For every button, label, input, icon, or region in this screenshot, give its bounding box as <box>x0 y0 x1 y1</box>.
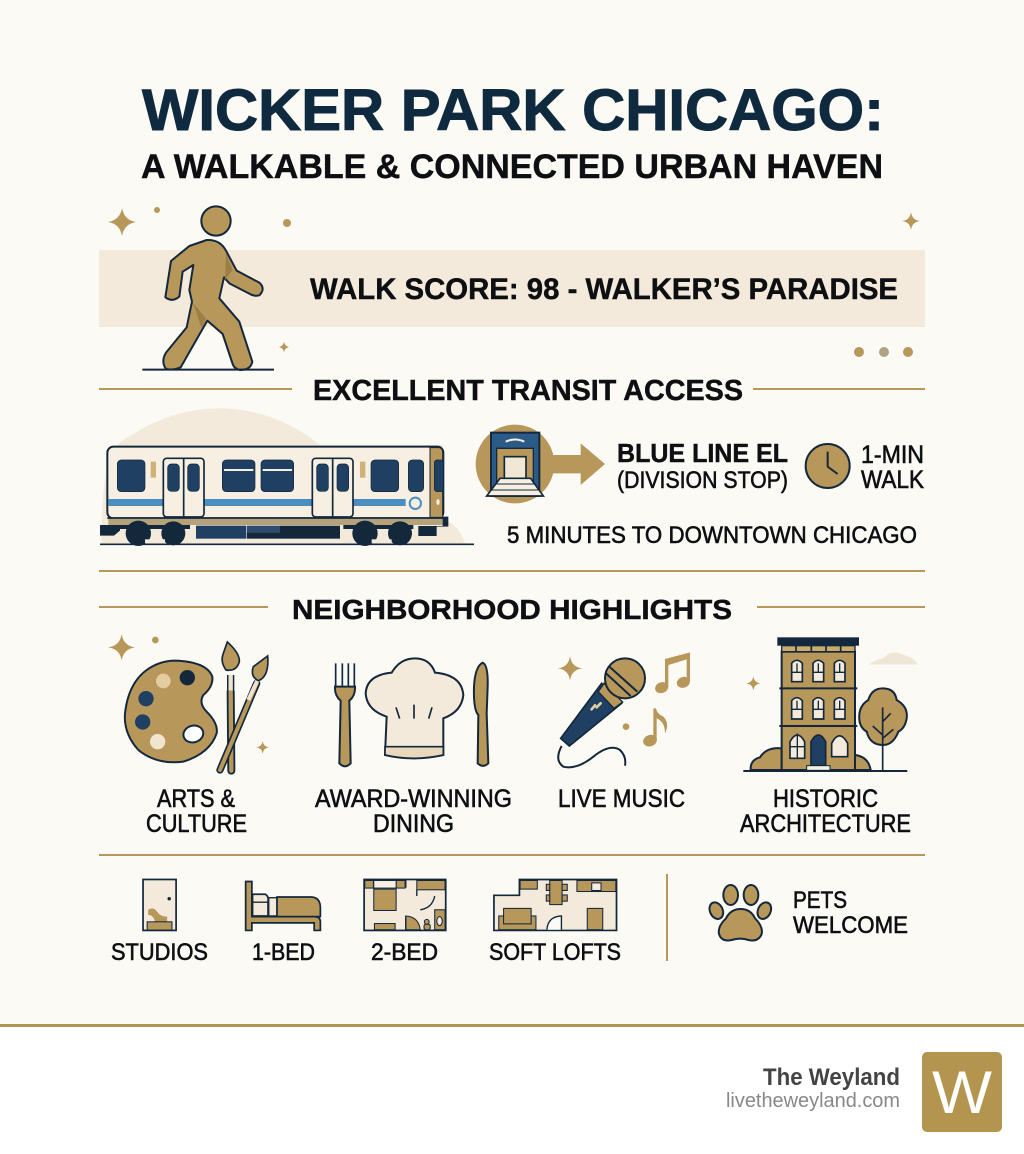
dining label: DINING <box>373 810 454 838</box>
panel: apartment types <box>111 874 908 966</box>
transit heading: EXCELLENT TRANSIT ACCESS <box>313 375 743 407</box>
one bed label: 1-BED <box>252 939 315 966</box>
arts label: CULTURE <box>146 810 247 838</box>
icon: historic building and tree <box>743 637 918 771</box>
division stop label: (DIVISION STOP) <box>617 467 788 494</box>
arts label: ARTS & <box>157 785 235 813</box>
arts label <box>146 785 247 838</box>
icon: clock <box>806 444 850 488</box>
pets label <box>793 887 908 939</box>
icon: studio door <box>143 879 176 930</box>
pets label: PETS <box>793 887 847 914</box>
icon: station entrance with arrow <box>476 425 605 503</box>
title: WICKER PARK CHICAGO: <box>142 78 884 143</box>
icon: fork, chef hat and knife <box>335 658 488 766</box>
architecture label: HISTORIC <box>773 785 878 813</box>
dining label <box>315 785 512 838</box>
title <box>141 78 884 186</box>
icon: two-bed floor plan <box>364 879 446 930</box>
icon: microphone and notes <box>558 652 691 767</box>
website: livetheweyland.com <box>726 1090 900 1112</box>
decorative sparkles and dots <box>108 207 920 357</box>
walk score band <box>99 250 925 327</box>
icon: bed <box>246 882 320 930</box>
walk time label <box>861 441 924 494</box>
brand name: The Weyland <box>763 1064 900 1091</box>
studios label: STUDIOS <box>111 939 208 966</box>
panel: neighborhood highlights <box>99 594 925 838</box>
icon: walking person <box>142 206 274 370</box>
walk time label: WALK <box>861 466 924 494</box>
icon: palette and brushes <box>108 634 269 771</box>
soft lofts label: SOFT LOFTS <box>489 939 621 966</box>
downtown time text: 5 MINUTES TO DOWNTOWN CHICAGO <box>507 522 917 549</box>
music label: LIVE MUSIC <box>558 785 685 813</box>
footer <box>0 1024 1024 1154</box>
icon: soft loft floor plan <box>494 879 617 930</box>
logo badge <box>922 1052 1002 1132</box>
subtitle: A WALKABLE & CONNECTED URBAN HAVEN <box>141 148 883 186</box>
two bed label: 2-BED <box>371 939 438 966</box>
blue line label <box>617 438 788 494</box>
blue line label: BLUE LINE EL <box>617 438 788 468</box>
highlights heading: NEIGHBORHOOD HIGHLIGHTS <box>292 594 732 625</box>
walk time label: 1-MIN <box>861 441 924 469</box>
dining label: AWARD-WINNING <box>315 785 512 813</box>
architecture label <box>740 785 911 838</box>
pets label: WELCOME <box>793 912 908 939</box>
icon: train <box>100 408 474 546</box>
icon: paw print <box>707 885 774 941</box>
panel: transit access <box>99 375 925 549</box>
panel: walk score <box>99 206 925 370</box>
architecture label: ARCHITECTURE <box>740 810 911 838</box>
walk score text: WALK SCORE: 98 - WALKER’S PARADISE <box>310 273 898 306</box>
logo badge: W <box>932 1059 992 1126</box>
